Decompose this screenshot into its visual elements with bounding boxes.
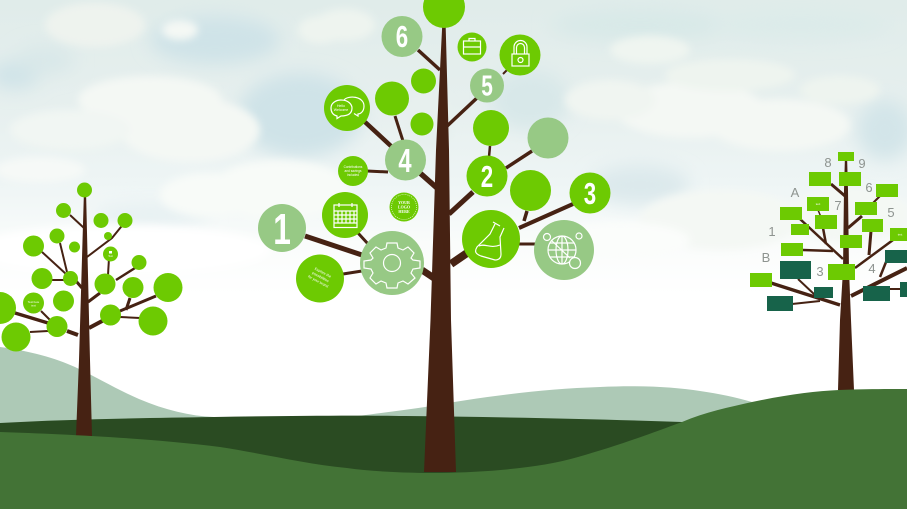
leaf circles upper xyxy=(375,68,568,211)
left tree small labels xyxy=(28,251,113,308)
icon: globe network xyxy=(544,233,582,268)
right tree boxes: text xyxy=(898,232,902,236)
circle 2 xyxy=(466,156,508,196)
circle: speech bubbles xyxy=(324,85,370,131)
right tree labels: 5 xyxy=(887,205,895,220)
right tree boxes: text xyxy=(816,202,820,206)
circle: calendar xyxy=(322,192,368,238)
right tree labels: A xyxy=(791,185,800,200)
circle: rotated text xyxy=(296,254,344,302)
right tree boxes xyxy=(750,152,907,311)
circle 5: 5 xyxy=(481,70,493,102)
left tree small labels: text xyxy=(31,304,36,308)
left tree branches xyxy=(15,215,156,335)
circle: rotated text: Explore the xyxy=(314,267,332,279)
main tree xyxy=(258,0,610,472)
right tree labels: 4 xyxy=(868,261,876,276)
right tree labels: 1 xyxy=(768,224,776,239)
left tree trunk xyxy=(76,190,92,436)
circle: rotated text: possibilities xyxy=(311,271,330,283)
circle: logo badge: LOGO xyxy=(398,204,410,210)
circle: small text: and savings xyxy=(344,169,362,173)
circle: speech bubbles: Welcome xyxy=(334,108,348,112)
circle: logo badge: YOUR xyxy=(398,200,410,205)
icon: padlock xyxy=(512,41,529,66)
left tree small labels: Text here xyxy=(28,300,40,304)
left tree foliage xyxy=(0,182,182,352)
circle 4 xyxy=(385,140,426,180)
circle 2: 2 xyxy=(481,159,493,194)
circle 4: 4 xyxy=(398,143,412,180)
right tree labels: 3 xyxy=(816,264,824,279)
circle: flask xyxy=(462,210,520,268)
circle 6 xyxy=(382,16,422,57)
circle: logo badge: HERE xyxy=(398,209,410,214)
circle: briefcase xyxy=(458,32,486,62)
right tree labels: 8 xyxy=(824,155,832,170)
circle 3 xyxy=(570,172,610,214)
main tree trunk xyxy=(424,20,456,472)
icon: flask xyxy=(476,222,504,260)
icon: calendar xyxy=(334,203,357,228)
hill: pale right xyxy=(358,386,752,425)
circle: small text xyxy=(338,156,368,186)
circle 1 xyxy=(258,204,306,254)
circle 1: 1 xyxy=(273,205,291,254)
circle 3: 3 xyxy=(584,176,596,211)
right tree labels: 9 xyxy=(858,156,866,171)
main tree top circle xyxy=(423,0,465,28)
circle: speech bubbles: Hello xyxy=(337,104,345,108)
icon: briefcase xyxy=(464,38,480,54)
circle: gear xyxy=(360,231,424,295)
left tree small labels: Text xyxy=(108,255,113,258)
right tree labels xyxy=(762,155,895,279)
circle: small text: included xyxy=(347,173,359,177)
right tree xyxy=(750,152,907,390)
circle: globe xyxy=(534,220,594,280)
circle: rotated text: for your brand xyxy=(307,275,329,289)
icon: speech bubbles xyxy=(331,97,364,118)
right tree labels: 7 xyxy=(834,198,842,213)
right tree labels: B xyxy=(762,250,770,265)
circle 5 xyxy=(470,68,504,102)
right tree trunk xyxy=(838,155,854,390)
circle: logo badge xyxy=(390,192,418,222)
right tree branches xyxy=(771,160,907,305)
circle: lock xyxy=(500,34,540,76)
hill: dark middle xyxy=(0,416,700,480)
main tree branches xyxy=(305,50,573,278)
circle: small text: Contributions xyxy=(344,165,363,169)
hill: pale left xyxy=(0,347,214,430)
hill: front green xyxy=(0,389,907,509)
icon: gear xyxy=(364,243,420,288)
left tree xyxy=(0,182,182,436)
right tree labels: 6 xyxy=(865,180,873,195)
circle 6: 6 xyxy=(396,19,408,54)
